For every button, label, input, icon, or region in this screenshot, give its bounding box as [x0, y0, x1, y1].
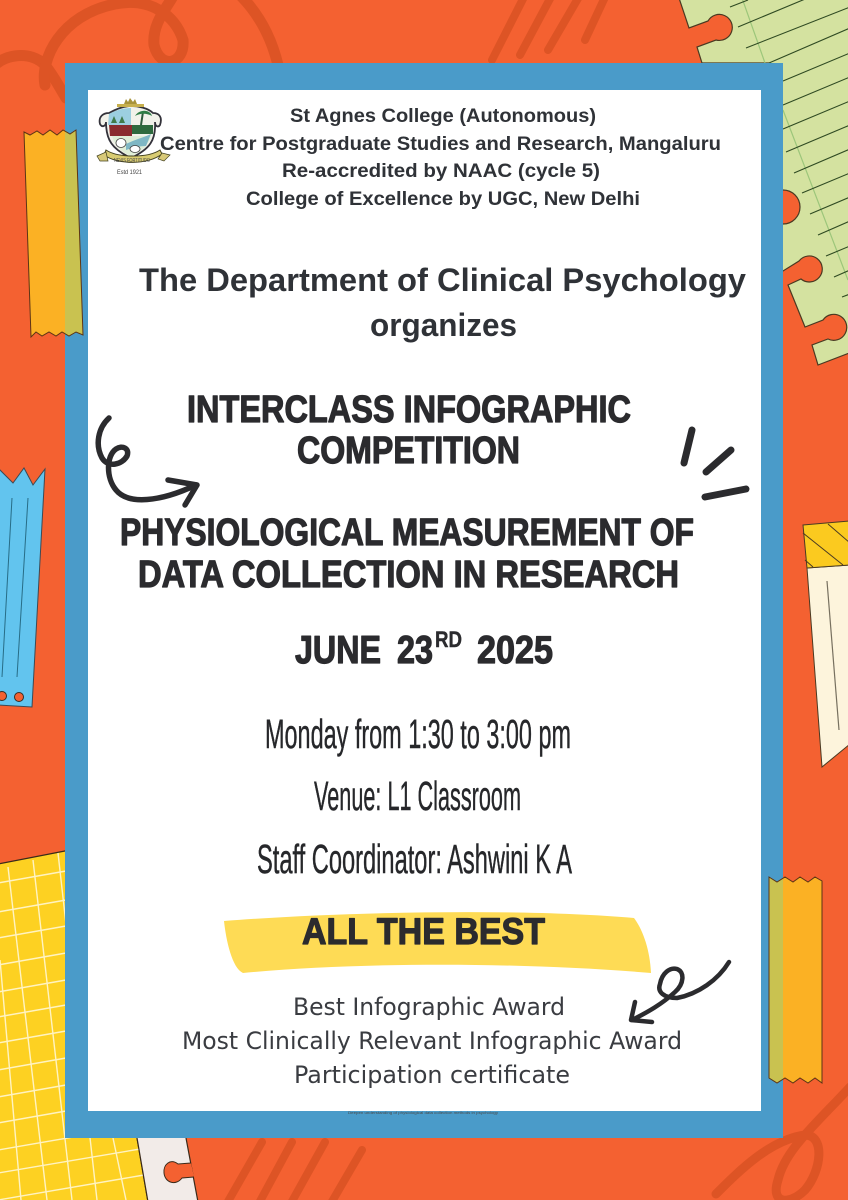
competition title: INTERCLASS INFOGRAPHIC [187, 389, 631, 431]
date: 23 [397, 629, 433, 672]
icon: curly arrow left [98, 418, 197, 505]
left tape [24, 130, 83, 337]
white puzzle paper bottom [137, 1138, 198, 1200]
college header text: Re-accredited by NAAC (cycle 5) [282, 161, 600, 182]
date [295, 627, 553, 672]
cream note right [803, 521, 848, 767]
department heading: The Department of Clinical Psychology [139, 262, 746, 298]
topic title [120, 512, 694, 596]
right tape [769, 877, 822, 1083]
all the best banner: ALL THE BEST [302, 911, 545, 952]
background scribble top left [0, 0, 278, 98]
event details: Staff Coordinator: Ashwini K A [257, 836, 572, 882]
college crest logo [97, 98, 170, 176]
date: 2025 [477, 629, 553, 672]
competition title: COMPETITION [297, 430, 520, 472]
all the best banner [224, 911, 651, 973]
blue frame [65, 63, 783, 1138]
background scribble bottom centre [226, 1142, 362, 1200]
department heading: organizes [370, 307, 517, 343]
department heading [139, 262, 746, 343]
yellow grid paper bottom left [0, 850, 148, 1200]
date: JUNE [295, 629, 381, 672]
awards list: Participation certificate [294, 1061, 570, 1089]
college header text: College of Excellence by UGC, New Delhi [246, 189, 640, 210]
background scribble bottom right [716, 1087, 848, 1200]
awards list [182, 993, 682, 1089]
background scribble top right [492, 0, 606, 60]
topic title: PHYSIOLOGICAL MEASUREMENT OF [120, 512, 694, 554]
college header text [160, 106, 721, 210]
tiny footer text: Deepen understanding of physiological data collection methods in psychology [348, 1110, 498, 1115]
event details: Venue: L1 Classroom [314, 773, 521, 819]
awards list: Most Clinically Relevant Infographic Award [182, 1027, 682, 1055]
college crest logo: Estd 1921 [117, 169, 142, 176]
topic title: DATA COLLECTION IN RESEARCH [138, 554, 679, 596]
icon: emphasis strokes [684, 430, 746, 497]
event details [257, 711, 572, 882]
college crest logo: NEVIS FORTITUDO [114, 158, 150, 164]
college header text: St Agnes College (Autonomous) [290, 106, 596, 127]
torn blue note left [0, 468, 45, 707]
event details: Monday from 1:30 to 3:00 pm [265, 711, 571, 757]
date: RD [435, 627, 462, 652]
white panel [88, 90, 761, 1111]
awards list: Best Infographic Award [293, 993, 565, 1021]
competition title [187, 389, 631, 472]
college header text: Centre for Postgraduate Studies and Research, Mangaluru [160, 134, 721, 155]
icon: curly arrow right [631, 962, 729, 1022]
notebook paper top right [678, 0, 848, 365]
